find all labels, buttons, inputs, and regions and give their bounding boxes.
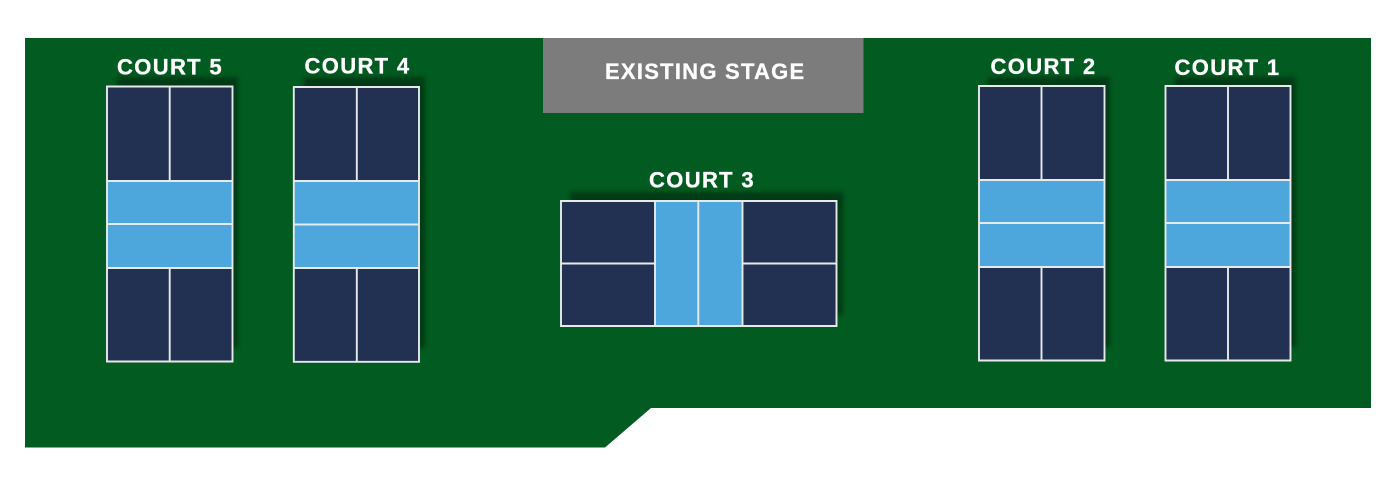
- court 4: [294, 54, 425, 362]
- court 3 label: COURT 3: [649, 168, 755, 192]
- court 4 label: COURT 4: [304, 54, 411, 78]
- court 1 label: COURT 1: [1174, 55, 1281, 80]
- court 3: [561, 168, 843, 326]
- court 2 label: COURT 2: [990, 54, 1097, 79]
- stage label: EXISTING STAGE: [605, 59, 805, 84]
- existing stage: [543, 38, 864, 113]
- court 5 label: COURT 5: [117, 54, 223, 80]
- court 2: [979, 54, 1110, 360]
- court 5: [107, 54, 238, 362]
- court 1: [1166, 55, 1296, 360]
